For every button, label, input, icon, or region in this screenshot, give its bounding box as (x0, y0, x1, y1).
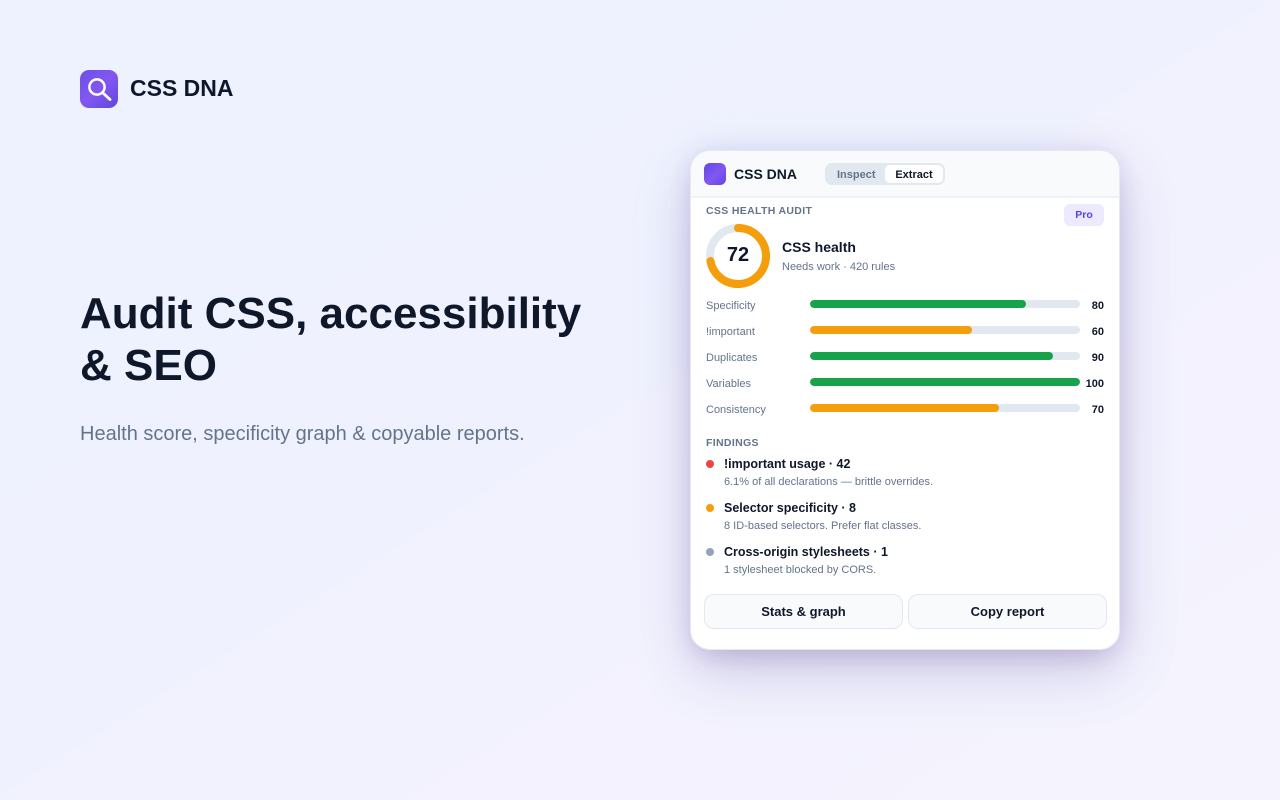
button: stats (704, 594, 903, 629)
metric: variables: Variables (706, 378, 751, 390)
metric: consistency: 70 (1092, 404, 1104, 416)
metric: variables: 100 (1086, 378, 1104, 390)
button: copy report: Copy report (971, 604, 1044, 619)
pro badge (1064, 204, 1104, 226)
metric: consistency (706, 404, 1104, 416)
finding: important usage: !important usage · 42 (724, 457, 850, 471)
icon: magnifier (80, 70, 118, 108)
health subtitle: Needs work · 420 rules (782, 260, 895, 272)
button: copy report (908, 594, 1107, 629)
metric: duplicates: 90 (1092, 352, 1104, 364)
metric: variables (706, 378, 1104, 390)
panel: app card (690, 150, 1120, 650)
pro badge: Pro (1075, 209, 1093, 221)
donut score (706, 224, 770, 288)
finding: cross-origin: Cross-origin stylesheets · 1 (724, 545, 888, 559)
finding: selector specificity: 8 ID-based selectors. Prefer flat classes. (724, 520, 921, 532)
header icon (704, 163, 726, 185)
metric: important: !important (706, 326, 755, 338)
subheading: Health score, specificity graph & copyable reports. (80, 423, 525, 445)
headline (80, 289, 581, 390)
finding: cross-origin: 1 stylesheet blocked by CORS. (724, 564, 876, 576)
header title: CSS DNA (734, 166, 797, 182)
headline: & SEO (80, 341, 217, 390)
finding: selector specificity: Selector specificity · 8 (724, 501, 856, 515)
brand name: CSS DNA (130, 75, 234, 101)
button: stats: Stats & graph (761, 604, 846, 619)
tab: inspect: Inspect (837, 169, 876, 181)
tab: extract (885, 165, 943, 183)
metric: consistency: Consistency (706, 404, 766, 416)
metric: specificity: Specificity (706, 300, 756, 312)
card header (691, 151, 1119, 198)
headline: Audit CSS, accessibility (80, 289, 581, 338)
health title: CSS health (782, 239, 856, 255)
brand logo (80, 70, 234, 108)
section label: findings: FINDINGS (706, 437, 759, 449)
metric: important: 60 (1092, 326, 1104, 338)
donut score: 72 (727, 244, 749, 266)
tab switcher (825, 163, 945, 185)
finding: important usage: 6.1% of all declarations — brittle overrides. (724, 476, 933, 488)
section label: health audit: CSS HEALTH AUDIT (706, 205, 812, 217)
finding: important usage (706, 457, 933, 488)
tab: extract: Extract (895, 169, 933, 181)
finding: cross-origin (706, 545, 888, 576)
finding: selector specificity (706, 501, 921, 532)
metric: duplicates: Duplicates (706, 352, 757, 364)
metric: specificity (706, 300, 1104, 312)
metric: duplicates (706, 352, 1104, 364)
metric: specificity: 80 (1092, 300, 1104, 312)
metric: important (706, 326, 1104, 338)
